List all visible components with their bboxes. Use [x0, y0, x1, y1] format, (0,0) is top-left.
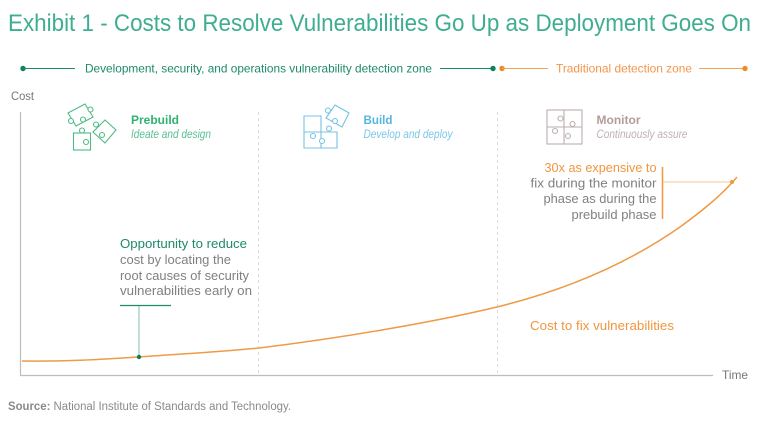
zone bar: traditional detection: [499, 62, 748, 76]
phase label: monitor: Continuously assure: [596, 127, 688, 141]
phase label: monitor: [596, 113, 688, 141]
source note: Source: National Institute of Standards and Technology.: [8, 401, 291, 413]
icon: monitor puzzle pieces: [547, 110, 582, 144]
phase label: build: Build: [364, 113, 392, 127]
callout: opportunity to reduce: Opportunity to reduce: [120, 236, 247, 251]
phase label: build: [364, 113, 453, 141]
callout: 30x as expensive: [530, 160, 657, 222]
callout: 30x as expensive: prebuild phase: [572, 207, 656, 222]
x axis label: Time: [722, 368, 748, 382]
phase label: prebuild: Ideate and design: [131, 127, 211, 141]
callout: opportunity to reduce: vulnerabilities early on: [120, 283, 252, 298]
phase label: prebuild: Prebuild: [131, 113, 179, 127]
cost curve: [22, 177, 737, 361]
icon: prebuild puzzle pieces: [68, 104, 116, 150]
callout bracket and leader: [662, 167, 734, 219]
phase dividers: [258, 112, 498, 375]
phase label: monitor: Monitor: [596, 113, 641, 127]
curve label: Cost to fix vulnerabilities: [530, 318, 675, 333]
zone bar: development, security, and operations: Development, security, and operations vulnerability detection zone: [85, 62, 432, 76]
phase label: build: Develop and deploy: [364, 127, 453, 141]
callout: opportunity to reduce: [120, 236, 252, 298]
zone bar: traditional detection: Traditional detection zone: [556, 62, 692, 76]
callout: 30x as expensive: phase as during the: [544, 191, 656, 206]
callout: 30x as expensive: fix during the monitor: [530, 176, 657, 190]
callout: opportunity to reduce: cost by locating the: [120, 252, 231, 267]
y axis label: Cost: [11, 89, 35, 103]
opportunity leader and marker: [120, 306, 171, 359]
icon: build puzzle pieces: [304, 105, 349, 148]
chart axes: [20, 112, 713, 376]
callout: 30x as expensive: 30x as expensive to: [544, 160, 656, 175]
phase label: prebuild: [131, 113, 211, 141]
callout: opportunity to reduce: root causes of security: [120, 268, 249, 283]
